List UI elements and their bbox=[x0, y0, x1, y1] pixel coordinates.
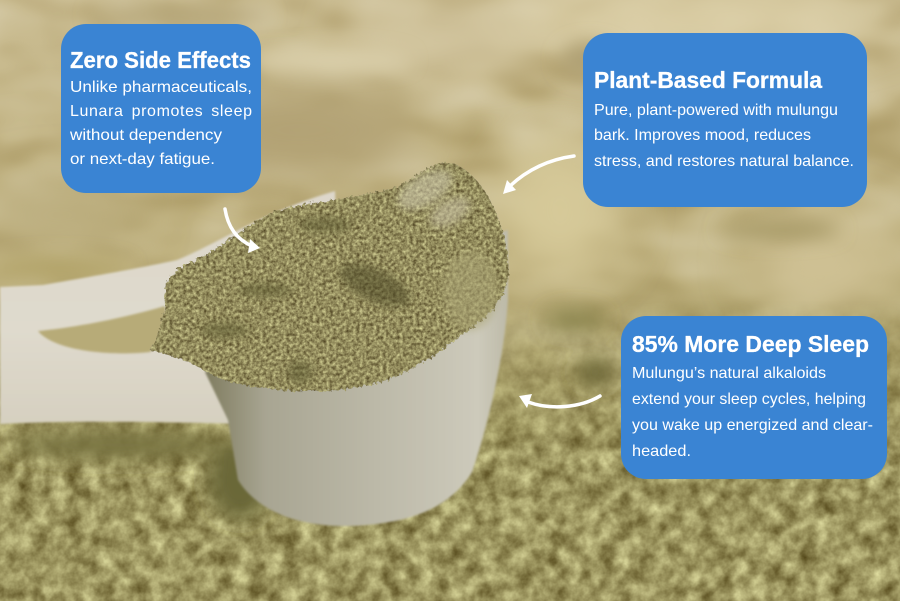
handle opening bbox=[38, 306, 170, 353]
arrow: to scoop from Zero Side Effects bbox=[225, 209, 260, 253]
body text: or next-day fatigue. bbox=[70, 151, 215, 168]
body text bbox=[632, 365, 873, 460]
body text bbox=[594, 102, 854, 170]
callout: 85% More Deep Sleep bbox=[621, 316, 887, 479]
body text: extend your sleep cycles, helping bbox=[632, 391, 866, 408]
body text: without dependency bbox=[69, 127, 222, 144]
arrow: to scoop from 85% More Deep Sleep bbox=[519, 394, 600, 408]
body text: Mulungu’s natural alkaloids bbox=[632, 365, 826, 382]
mound shadows bbox=[201, 162, 498, 384]
arrow: to powder from Plant-Based Formula bbox=[503, 156, 574, 194]
body text: you wake up energized and clear- bbox=[632, 417, 873, 434]
body text: headed. bbox=[632, 443, 691, 460]
powder mound bbox=[150, 162, 508, 391]
body text: Lunara promotes sleep bbox=[70, 103, 252, 120]
body text: Pure, plant-powered with mulungu bbox=[594, 102, 838, 119]
scoop handle bbox=[0, 191, 340, 424]
callout: Plant-Based Formula bbox=[583, 33, 867, 207]
body text: stress, and restores natural balance. bbox=[594, 153, 854, 170]
scoop cup bbox=[205, 230, 508, 526]
body text: bark. Improves mood, reduces bbox=[594, 127, 811, 144]
heading: Plant-Based Formula bbox=[594, 67, 822, 93]
body text bbox=[69, 79, 252, 168]
callout: Zero Side Effects bbox=[61, 24, 261, 193]
heading: Zero Side Effects bbox=[70, 47, 251, 73]
body text: Unlike pharmaceuticals, bbox=[70, 79, 252, 96]
heading: 85% More Deep Sleep bbox=[632, 331, 869, 357]
